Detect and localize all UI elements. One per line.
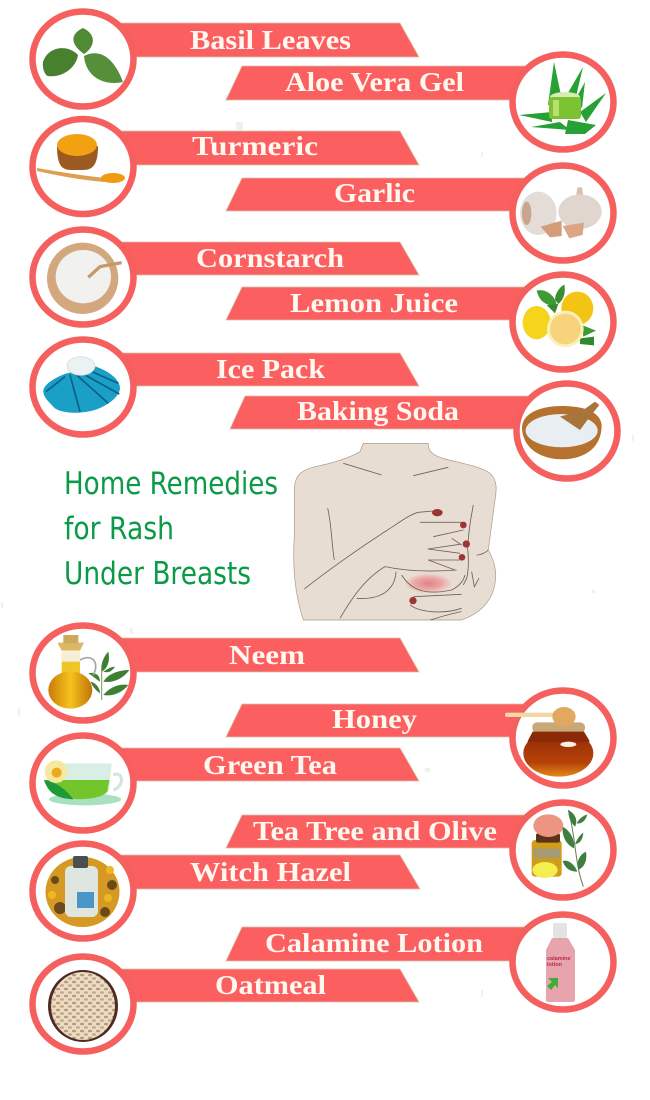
label: Garlic [334,178,415,208]
icon: oatmeal bowl [48,970,118,1042]
illustration: torso with rash [294,443,496,620]
ring [32,956,134,1052]
remedy: Oatmeal [32,956,419,1052]
label: Ice Pack [216,354,325,384]
remedy: Green Tea [32,736,419,830]
icon: baking soda bowl [522,402,602,459]
icon: calamine bottle: calamine [547,956,571,962]
ribbon [226,704,530,737]
icon: aloe jar [519,62,606,134]
remedy: Baking Soda [230,384,618,478]
remedy: Cornstarch [32,230,419,324]
remedy: Honey [226,690,614,786]
label: Cornstarch [196,243,344,273]
remedy: Turmeric [32,119,419,214]
icon: green tea cup [44,760,121,805]
ring [32,736,134,830]
title [64,466,278,592]
icon: garlic [520,187,602,238]
ribbon [226,287,530,320]
ring [32,340,134,434]
title: Under Breasts [64,556,251,592]
ribbon [115,353,419,386]
ribbon [226,178,530,211]
remedy: Calamine Lotion [226,914,614,1010]
icon: honey jar [505,707,593,777]
ribbon [115,748,419,781]
label: Turmeric [192,131,318,161]
icon: cornstarch bowl [47,243,122,314]
ribbon [226,815,530,848]
ribbon [115,131,419,165]
icon: calamine bottle: lotion [547,962,563,968]
icon: ice pack [43,357,120,413]
label: Neem [229,640,306,670]
label: Honey [332,704,418,734]
ribbon [115,638,419,672]
label: Baking Soda [297,396,460,426]
ring [512,802,614,898]
remedy: Garlic [226,166,614,260]
ribbon [115,969,419,1002]
ring [516,384,618,478]
remedy: Aloe Vera Gel [226,54,614,150]
ribbon [115,242,419,275]
icon: witch hazel bottle [46,856,120,927]
label: Aloe Vera Gel [285,67,465,97]
ribbon [226,66,530,100]
icon: tea tree oil bottle and sprig [532,810,587,887]
ring [32,626,134,720]
icon: turmeric bowl and spoon [37,134,125,183]
ring [32,230,134,324]
ribbon [115,23,419,57]
ring [32,12,134,106]
remedy: Ice Pack [32,340,419,434]
remedy: Tea Tree and Olive [226,802,614,898]
icon: calamine bottle [546,923,575,1002]
ring [32,119,134,214]
remedy: Neem [32,626,419,720]
label: Oatmeal [215,970,327,1000]
ribbon [230,396,535,429]
label: Green Tea [203,750,338,780]
ribbon [115,855,420,889]
ring [512,914,614,1010]
ring [512,166,614,260]
title: Home Remedies [64,466,278,502]
ring [512,690,614,786]
icon: lemons [523,285,596,347]
icon: basil [43,28,123,83]
remedy: Basil Leaves [32,12,419,106]
label: Basil Leaves [190,25,351,55]
ring [512,274,614,370]
ring [32,844,134,938]
ring [512,54,614,150]
remedy: Witch Hazel [32,844,420,938]
icon: neem oil [48,635,129,709]
remedy: Lemon Juice [226,274,614,370]
ribbon [226,927,530,961]
label: Tea Tree and Olive [253,816,497,846]
label: Lemon Juice [290,288,458,318]
label: Calamine Lotion [265,928,483,958]
title: for Rash [64,511,174,547]
label: Witch Hazel [190,857,352,887]
